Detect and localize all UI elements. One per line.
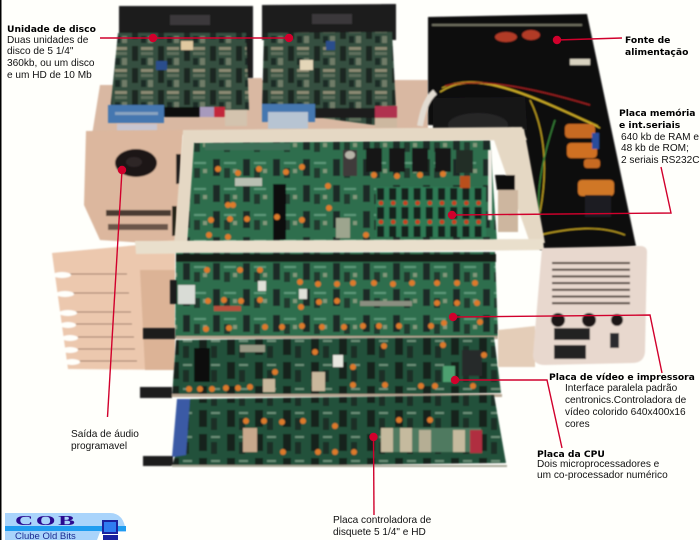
label: audio output [71,429,139,452]
memory and serial board [186,140,497,242]
callout: power supply leader [554,36,622,44]
label: floppy controller: disquete 5 1/4" e HD [333,527,426,538]
label: CPU board [537,449,668,481]
label: memory board: 2 seriais RS232C [621,155,700,166]
speaker panel [84,130,183,245]
disk drive unit right [262,4,397,129]
label: memory board: Placa memória [619,108,696,119]
callout lines and dots [100,34,671,515]
label: disk drive: Duas unidades de [7,35,89,46]
label: disk drive [7,24,96,81]
label: video board [549,372,695,430]
floppy controller board [143,395,507,467]
video and printer board [170,252,498,339]
label: power supply [625,35,688,58]
power supply case [420,14,636,250]
icon: computer monitor [102,520,118,540]
label: disk drive: 360kb, ou um disco [7,58,95,69]
callout: disk drive leader [100,34,292,42]
front control panel [498,246,647,367]
label: CPU board: um co-processador numérico [537,470,668,481]
callout: CPU board leader [452,376,562,448]
disk drive unit left [108,6,253,131]
callout: video board leader [450,314,662,373]
label: disk drive: e um HD de 10 Mb [7,70,92,81]
label: memory board [619,108,700,166]
card frame [135,127,545,254]
CPU board [140,328,502,398]
label: audio output: Saída de áudio [71,429,139,440]
label: floppy controller [333,515,432,538]
label: floppy controller: Placa controladora de [333,515,432,526]
chassis rear plate [92,78,428,135]
label: CPU board: Dois microprocessadores e [537,459,660,470]
label: disk drive: Unidade de disco [7,24,96,35]
label: memory board: 640 kb de RAM e [621,132,699,143]
label: power supply: alimentação [625,47,688,58]
label: audio output: programavel [71,441,127,452]
label: CPU board: Placa da CPU [537,449,605,460]
left card guide bracket [52,240,175,370]
callout: audio leader [108,166,126,417]
label: memory board: 48 kb de ROM; [621,143,689,154]
callout: memory board leader [448,167,671,218]
label: power supply: Fonte de [625,35,670,46]
label: video board: vídeo colorido 640x400x16 [565,407,686,418]
label: memory board: e int.seriais [619,120,681,131]
label: video board: Placa de vídeo e impressora [549,372,695,383]
logo: Clube Old Bits: COB [15,513,78,528]
logo: Clube Old Bits [5,513,126,540]
label: video board: cores [565,419,590,430]
callout: floppy controller leader [370,434,377,515]
label: video board: centronics.Controladora de [565,395,687,406]
label: video board: Interface paralela padrão [565,383,678,394]
label: disk drive: disco de 5 1/4" [7,46,74,57]
